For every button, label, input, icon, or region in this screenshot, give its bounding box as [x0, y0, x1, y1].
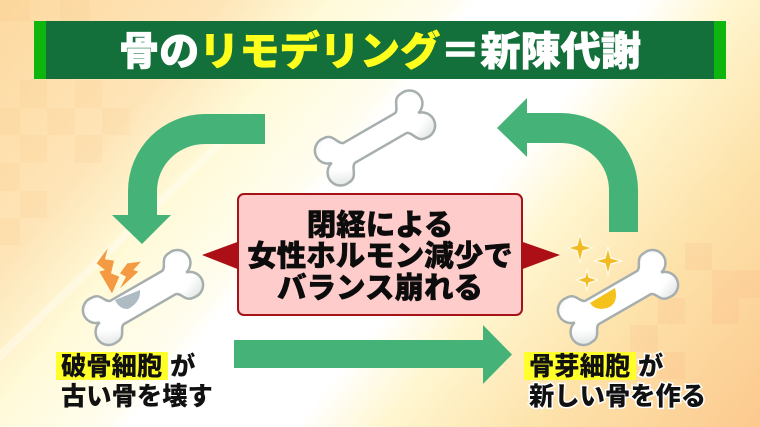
- label: osteoclast: [56, 352, 213, 411]
- icon: top bone: [310, 86, 440, 190]
- callout text: [247, 209, 513, 305]
- title banner: [34, 21, 726, 79]
- icon: lightning bolts: [97, 248, 141, 293]
- callout text: 閉経による: [307, 209, 453, 242]
- triangle: left pointer: [202, 241, 240, 270]
- arrow: top-right curved green arrow: [497, 98, 638, 232]
- arrow: top-left curved green arrow: [112, 114, 265, 244]
- new bone area: [590, 288, 616, 309]
- damaged area: [115, 290, 140, 309]
- icon: sparkles: [567, 234, 622, 291]
- triangle: right pointer: [520, 241, 560, 270]
- label: osteoclast: 破骨細胞: [61, 353, 162, 381]
- callout text: 女性ホルモン減少で: [247, 240, 513, 273]
- callout: menopause: [238, 194, 522, 315]
- label: osteoclast: が: [170, 352, 196, 381]
- icon: left damaged bone: [78, 245, 208, 350]
- arrow: bottom green arrow: [234, 325, 512, 384]
- label: osteoblast: 骨芽細胞: [529, 353, 630, 381]
- label: osteoblast: 新しい骨を作る: [529, 383, 706, 411]
- label: osteoblast: [524, 352, 706, 411]
- icon: right new bone: [553, 245, 683, 350]
- title text: 骨のリモデリング＝新陳代謝: [119, 29, 641, 74]
- label: osteoclast: 古い骨を壊す: [61, 383, 213, 411]
- callout text: バランス崩れる: [277, 272, 483, 305]
- label: osteoblast: が: [638, 352, 664, 381]
